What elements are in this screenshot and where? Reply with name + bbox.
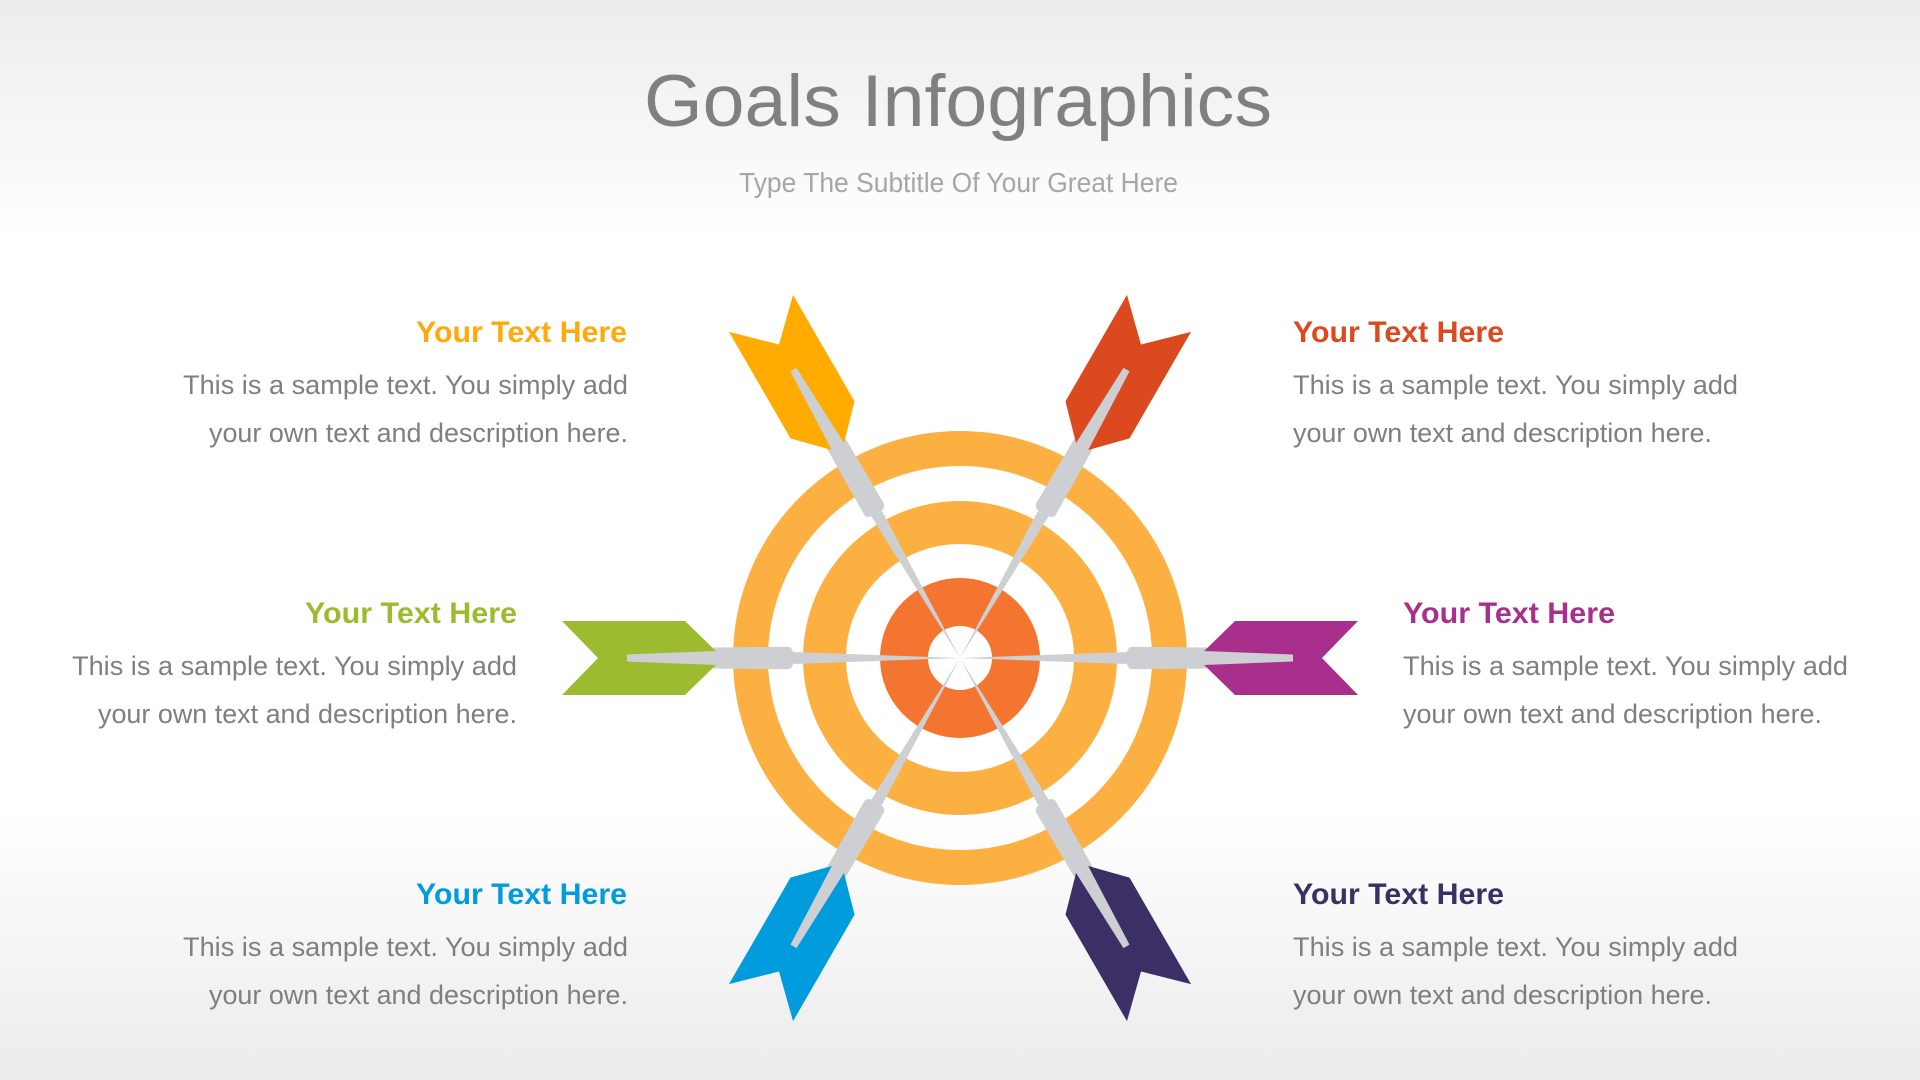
text block: yellow, upper left	[183, 316, 628, 448]
text block: green, left	[72, 597, 517, 729]
text block: blue, lower left: your own text and description here.	[209, 980, 628, 1010]
text block: navy, lower right	[1293, 878, 1738, 1010]
dart: red, upper right	[928, 295, 1191, 676]
text block: green, left: Your Text Here	[305, 597, 517, 630]
dart: green, left	[562, 621, 960, 695]
text block: navy, lower right: Your Text Here	[1293, 878, 1504, 911]
text block: yellow, upper left: your own text and description here.	[209, 418, 628, 448]
dart: yellow, upper left	[729, 295, 992, 676]
text block: purple, right: This is a sample text. You simply add	[1403, 651, 1848, 681]
text block: green, left: This is a sample text. You simply add	[72, 651, 517, 681]
text block: blue, lower left: This is a sample text. You simply add	[183, 932, 628, 962]
title: Goals Infographics	[644, 61, 1272, 142]
text block: yellow, upper left: Your Text Here	[416, 316, 627, 349]
text block: red, upper right: your own text and description here.	[1293, 418, 1712, 448]
text block: green, left: your own text and description here.	[98, 699, 517, 729]
text block: red, upper right: Your Text Here	[1293, 316, 1504, 349]
dart: purple, right	[960, 621, 1358, 695]
text block: purple, right: Your Text Here	[1403, 597, 1615, 630]
dart: navy, lower right	[928, 640, 1191, 1021]
subtitle: Type The Subtitle Of Your Great Here	[739, 167, 1178, 198]
text block: blue, lower left	[183, 878, 628, 1010]
text block: red, upper right	[1293, 316, 1738, 448]
text block: purple, right	[1403, 597, 1848, 729]
text block: navy, lower right: your own text and description here.	[1293, 980, 1712, 1010]
target: concentric rings	[750, 448, 1170, 868]
text block: purple, right: your own text and description here.	[1403, 699, 1822, 729]
dart: blue, lower left	[729, 640, 992, 1021]
text block: yellow, upper left: This is a sample text. You simply add	[183, 370, 628, 400]
text block: navy, lower right: This is a sample text. You simply add	[1293, 932, 1738, 962]
text block: blue, lower left: Your Text Here	[416, 878, 627, 911]
text block: red, upper right: This is a sample text. You simply add	[1293, 370, 1738, 400]
